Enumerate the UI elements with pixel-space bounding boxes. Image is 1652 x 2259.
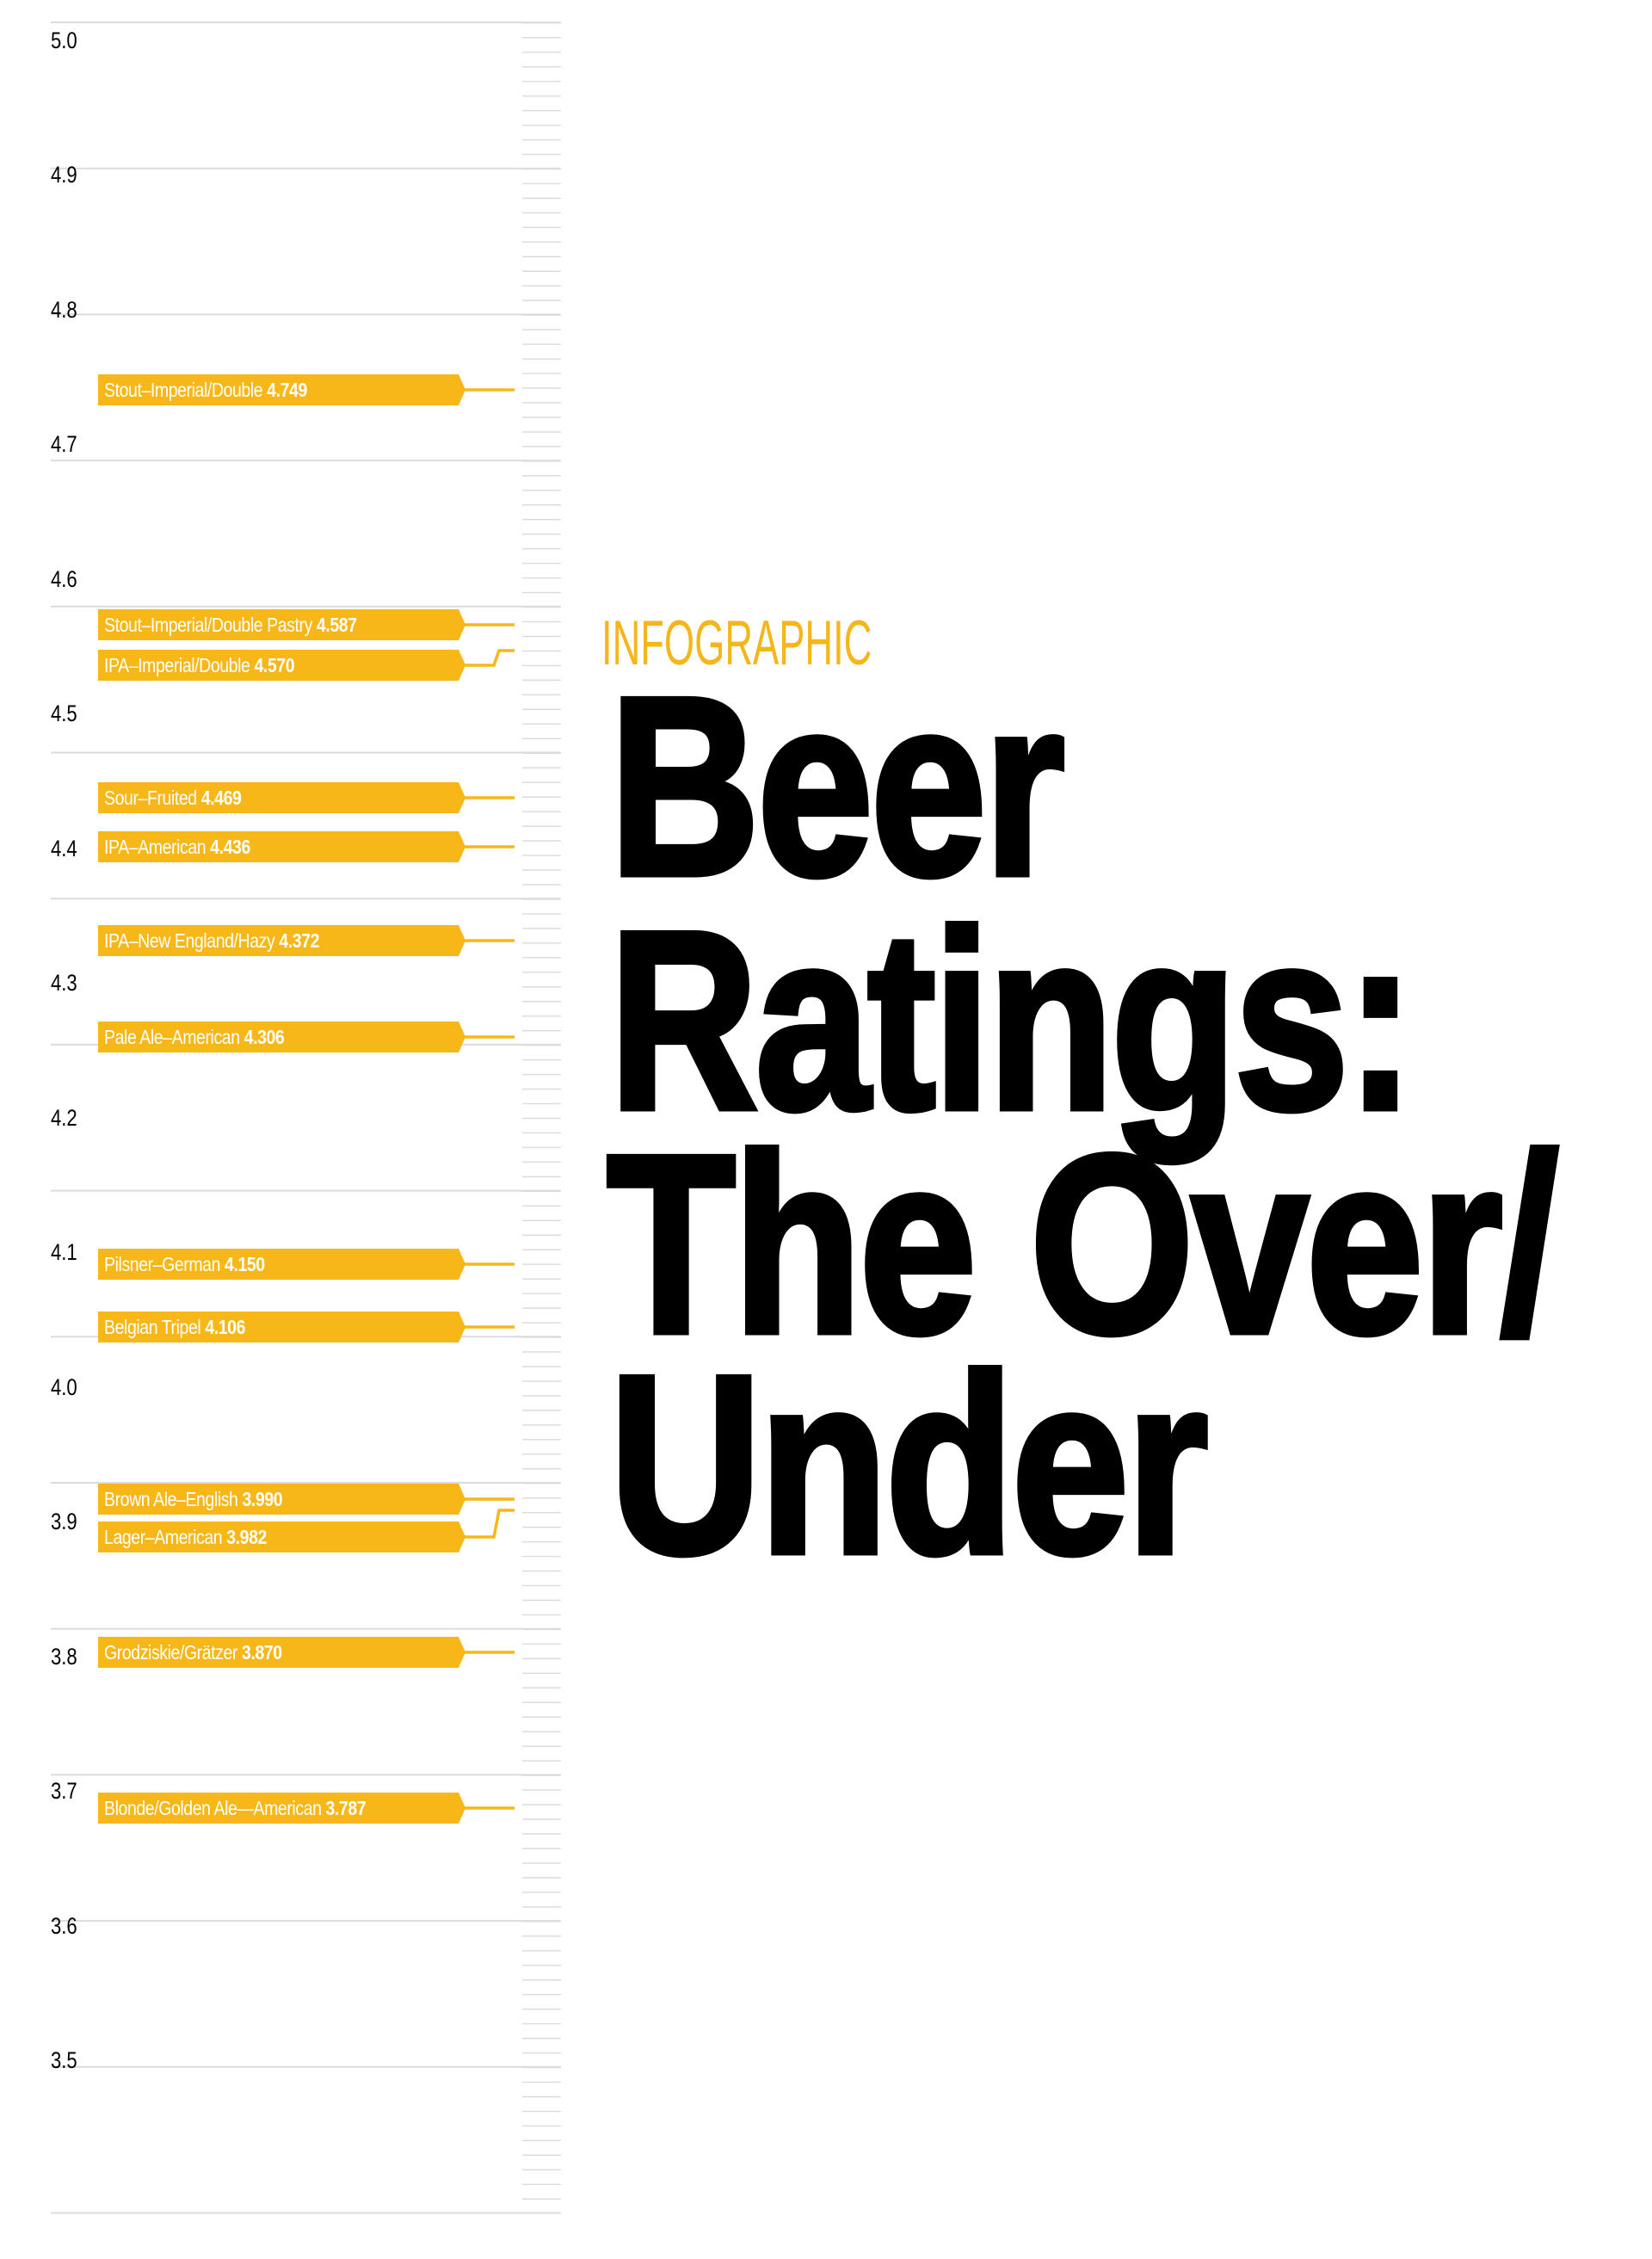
axis labels: 3.6 xyxy=(51,1914,77,1940)
bars xyxy=(98,374,465,1824)
title: The Over/ xyxy=(607,1102,1556,1386)
axis labels: 3.7 xyxy=(51,1779,77,1805)
axis labels: 3.8 xyxy=(51,1645,77,1670)
axis labels: 5.0 xyxy=(51,28,77,54)
title: Beer xyxy=(609,644,1063,929)
bar labels: IPA–American 4.436 xyxy=(104,835,250,858)
bar labels: IPA–Imperial/Double 4.570 xyxy=(104,653,295,676)
bar labels: Pale Ale–American 4.306 xyxy=(104,1025,285,1048)
kicker: INFOGRAPHIC: INFOGRAPHIC xyxy=(601,608,872,678)
bar labels: Stout–Imperial/Double 4.749 xyxy=(104,378,307,401)
axis labels: 4.4 xyxy=(51,836,77,862)
bar labels: Sour–Fruited 4.469 xyxy=(104,786,242,809)
axis labels: 4.6 xyxy=(51,567,77,593)
connectors xyxy=(463,390,515,1808)
bar labels xyxy=(104,378,367,1819)
bar labels: Pilsner–German 4.150 xyxy=(104,1252,265,1275)
chart: beer ratings scale xyxy=(51,22,561,2213)
bar labels: Lager–American 3.982 xyxy=(104,1525,267,1548)
axis labels: 4.8 xyxy=(51,298,77,324)
axis labels: 4.0 xyxy=(51,1375,77,1401)
axis labels: 3.9 xyxy=(51,1509,77,1535)
axis labels: 4.5 xyxy=(51,701,77,727)
title xyxy=(606,644,1560,1607)
axis labels: 4.1 xyxy=(51,1240,77,1266)
title: Ratings: xyxy=(609,878,1412,1163)
bar labels: Blonde/Golden Ale—American 3.787 xyxy=(104,1796,367,1819)
axis labels: 4.7 xyxy=(51,432,77,458)
axis labels: 4.3 xyxy=(51,971,77,997)
bar labels: Belgian Tripel 4.106 xyxy=(104,1315,245,1338)
axis labels: 4.2 xyxy=(51,1106,77,1132)
axis labels: 3.5 xyxy=(51,2048,77,2074)
axis labels: 4.9 xyxy=(51,163,77,188)
bar labels: Brown Ale–English 3.990 xyxy=(104,1487,283,1510)
bar labels: Stout–Imperial/Double Pastry 4.587 xyxy=(104,613,357,636)
title: Under xyxy=(609,1322,1205,1607)
bar labels: IPA–New England/Hazy 4.372 xyxy=(104,929,319,952)
bar labels: Grodziskie/Grätzer 3.870 xyxy=(104,1640,282,1663)
axis labels xyxy=(51,28,77,2074)
